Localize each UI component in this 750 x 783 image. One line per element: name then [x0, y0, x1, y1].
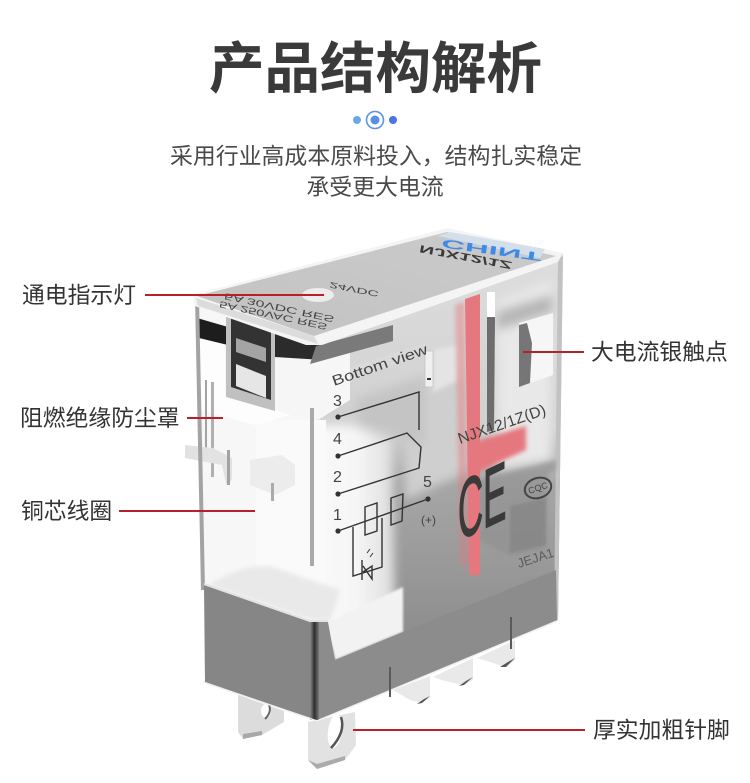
subtitle: 采用行业高成本原料投入，结构扎实稳定: [170, 143, 582, 169]
pins: [238, 640, 515, 769]
model text on top: NJX12/1Z: [418, 242, 514, 271]
white edge lines on base: [204, 584, 328, 621]
right face: [315, 253, 563, 720]
grey base left: [204, 585, 317, 720]
decorative dots icon: [353, 112, 397, 128]
top cover: 24VDC: [329, 280, 380, 298]
callout labels: [20, 282, 730, 743]
internals: white coil and frame: [200, 280, 552, 660]
title: 产品结构解析: [209, 38, 542, 100]
callout lines: [119, 295, 585, 730]
circuit labels: 2: [333, 469, 342, 486]
circuit labels: 1: [333, 507, 342, 524]
callout labels: 阻燃绝缘防尘罩: [20, 405, 180, 431]
right side internals: grey block: [478, 460, 556, 556]
left face: [197, 296, 315, 622]
circuit diagram: [338, 392, 428, 580]
circuit labels: (+): [421, 513, 436, 527]
circuit labels: 5: [423, 474, 432, 491]
callout labels: 通电指示灯: [22, 282, 136, 308]
right side internals: contact: [487, 292, 553, 432]
CQC mark: CQC: [527, 480, 550, 496]
top cover: 5A 250VAC RES: [218, 299, 328, 332]
CE mark: CE: [458, 442, 506, 559]
left grey rails: [185, 380, 314, 566]
circuit labels: JEJA1: [515, 545, 556, 571]
circuit labels: 4: [333, 431, 342, 448]
top cover: [192, 228, 563, 345]
indicator light: [302, 288, 334, 302]
circuit labels: 3: [333, 393, 342, 410]
callout labels: 厚实加粗针脚: [593, 717, 730, 743]
circuit labels: [330, 342, 556, 571]
top cover: CHINT: [440, 236, 544, 264]
red armature: [455, 294, 526, 575]
callout labels: 大电流银触点: [591, 339, 728, 365]
left edge: [195, 297, 205, 590]
relay product illustration: [185, 228, 563, 769]
brand strip: CHINT: [438, 232, 545, 258]
dark mechanism window: [197, 314, 393, 411]
circuit labels: Bottom view: [330, 342, 430, 390]
circuit terminal dots: [335, 414, 431, 534]
subtitle: [170, 143, 582, 200]
top cover: 5A 30VDC RES: [223, 291, 335, 324]
subtitle: 承受更大电流: [306, 174, 444, 200]
CQC mark: [522, 474, 554, 502]
callout labels: 铜芯线圈: [21, 498, 112, 524]
circuit labels: NJX12/1Z(D): [456, 402, 548, 448]
grey base right: [316, 570, 557, 720]
